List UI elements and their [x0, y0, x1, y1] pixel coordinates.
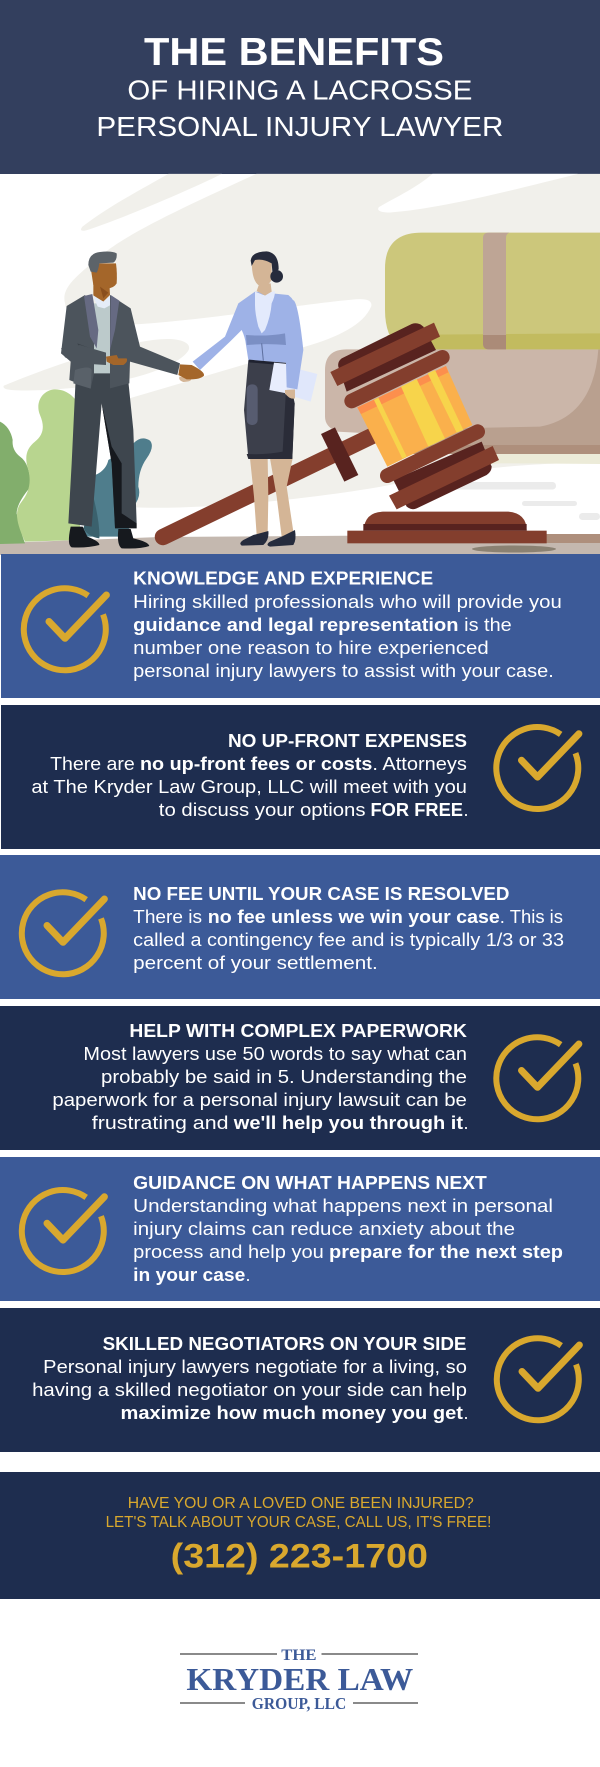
gavel handle [163, 436, 372, 537]
body text: injury claims can reduce anxiety about the [133, 1219, 515, 1239]
body text: number one reason to hire experienced [133, 638, 489, 658]
heading: HELP WITH COMPLEX PAPERWORK [129, 1020, 468, 1041]
logo: the kryder law group: KRYDER LAW [186, 1661, 413, 1697]
icon: gold check circle [24, 588, 106, 670]
gavel head and sound block [321, 323, 547, 543]
body text: There is [133, 907, 202, 927]
heading: GUIDANCE ON WHAT HAPPENS NEXT [133, 1172, 488, 1193]
icon: gold check circle [496, 1037, 579, 1119]
call to action text [106, 1495, 491, 1531]
plants [0, 389, 152, 544]
ground [0, 534, 600, 555]
body text: prepare for the next step [329, 1242, 563, 1262]
title banner [0, 0, 600, 174]
body text: percent of your settlement. [133, 953, 378, 973]
law book [325, 233, 600, 467]
panel: skilled negotiators on your side [0, 1308, 600, 1452]
heading: NO UP-FRONT EXPENSES [228, 730, 467, 751]
panel: guidance on what happens next [0, 1157, 600, 1301]
body text: probably be said in 5. Understanding the [101, 1067, 467, 1087]
logo: the kryder law group [180, 1647, 418, 1713]
icon: gold check circle [22, 892, 104, 974]
body text: process and help you [133, 1242, 324, 1262]
body text: personal injury lawyers to assist with your case. [133, 661, 554, 681]
body text: at The Kryder Law Group, LLC will meet with you [31, 777, 467, 797]
body text: having a skilled negotiator on your side can help [32, 1380, 467, 1400]
panel: no fee until your case is resolved [0, 855, 600, 999]
body text: frustrating and [92, 1113, 228, 1133]
body text [32, 1357, 469, 1423]
illustration: lawyer handshake and gavel [0, 174, 600, 555]
body text: no fee unless we win your case [208, 907, 500, 927]
body text: Personal injury lawyers negotiate for a living, so [43, 1357, 467, 1377]
body text: . [246, 1265, 251, 1285]
body text [133, 592, 562, 681]
body text: . Attorneys [372, 754, 467, 774]
body text: is the [464, 615, 512, 635]
man in suit [61, 252, 204, 549]
illustration background swooshes [4, 174, 600, 508]
body text [133, 1196, 563, 1285]
panel: no up-front expenses [1, 705, 600, 849]
body text: Understanding what happens next in personal [133, 1196, 553, 1216]
body text: to discuss your options [159, 800, 366, 820]
body text: maximize how much money you get [120, 1403, 463, 1423]
desk dashes [450, 482, 600, 520]
logo: the kryder law group: THE [281, 1647, 316, 1664]
body text: . [464, 1113, 469, 1133]
body text: guidance and legal representation [133, 615, 458, 635]
body text [31, 754, 469, 820]
body text: called a contingency fee and is typically 1/3 or 33 [133, 930, 564, 950]
body text: Most lawyers use 50 words to say what can [83, 1044, 467, 1064]
heading: NO FEE UNTIL YOUR CASE IS RESOLVED [133, 883, 509, 904]
icon: gold check circle [497, 1338, 579, 1420]
body text: in your case [133, 1265, 245, 1285]
subtitle line one: OF HIRING A LACROSSE [127, 74, 472, 105]
call to action text: HAVE YOU OR A LOVED ONE BEEN INJURED? [128, 1495, 474, 1512]
woman in blouse and skirt [193, 251, 317, 547]
body text [133, 907, 564, 973]
logo: the kryder law group: GROUP, LLC [252, 1694, 346, 1713]
heading: SKILLED NEGOTIATORS ON YOUR SIDE [103, 1333, 466, 1354]
call to action banner [0, 1472, 600, 1599]
body text [52, 1044, 469, 1133]
phone number: (312) 223-1700 [171, 1538, 428, 1576]
panel: knowledge and experience [1, 554, 600, 698]
body text: . [464, 1403, 469, 1423]
icon: gold check circle [22, 1190, 104, 1272]
body text: Hiring skilled professionals who will provide you [133, 592, 562, 612]
panel: help with complex paperwork [0, 1006, 600, 1150]
body text: There are [50, 754, 135, 774]
heading: KNOWLEDGE AND EXPERIENCE [133, 568, 433, 589]
call to action text: LET'S TALK ABOUT YOUR CASE, CALL US, IT'S FREE! [106, 1514, 491, 1531]
body text: paperwork for a personal injury lawsuit can be [52, 1090, 467, 1110]
subtitle line two: PERSONAL INJURY LAWYER [96, 111, 503, 142]
icon: gold check circle [496, 727, 579, 809]
body text: we'll help you through it [233, 1113, 463, 1133]
body text: . [464, 800, 469, 820]
body text: . This is [500, 907, 563, 927]
man forearm [61, 345, 106, 365]
body text: FOR FREE [370, 800, 463, 820]
body text: no up-front fees or costs [140, 754, 372, 774]
title: the benefits: THE BENEFITS [144, 31, 444, 74]
